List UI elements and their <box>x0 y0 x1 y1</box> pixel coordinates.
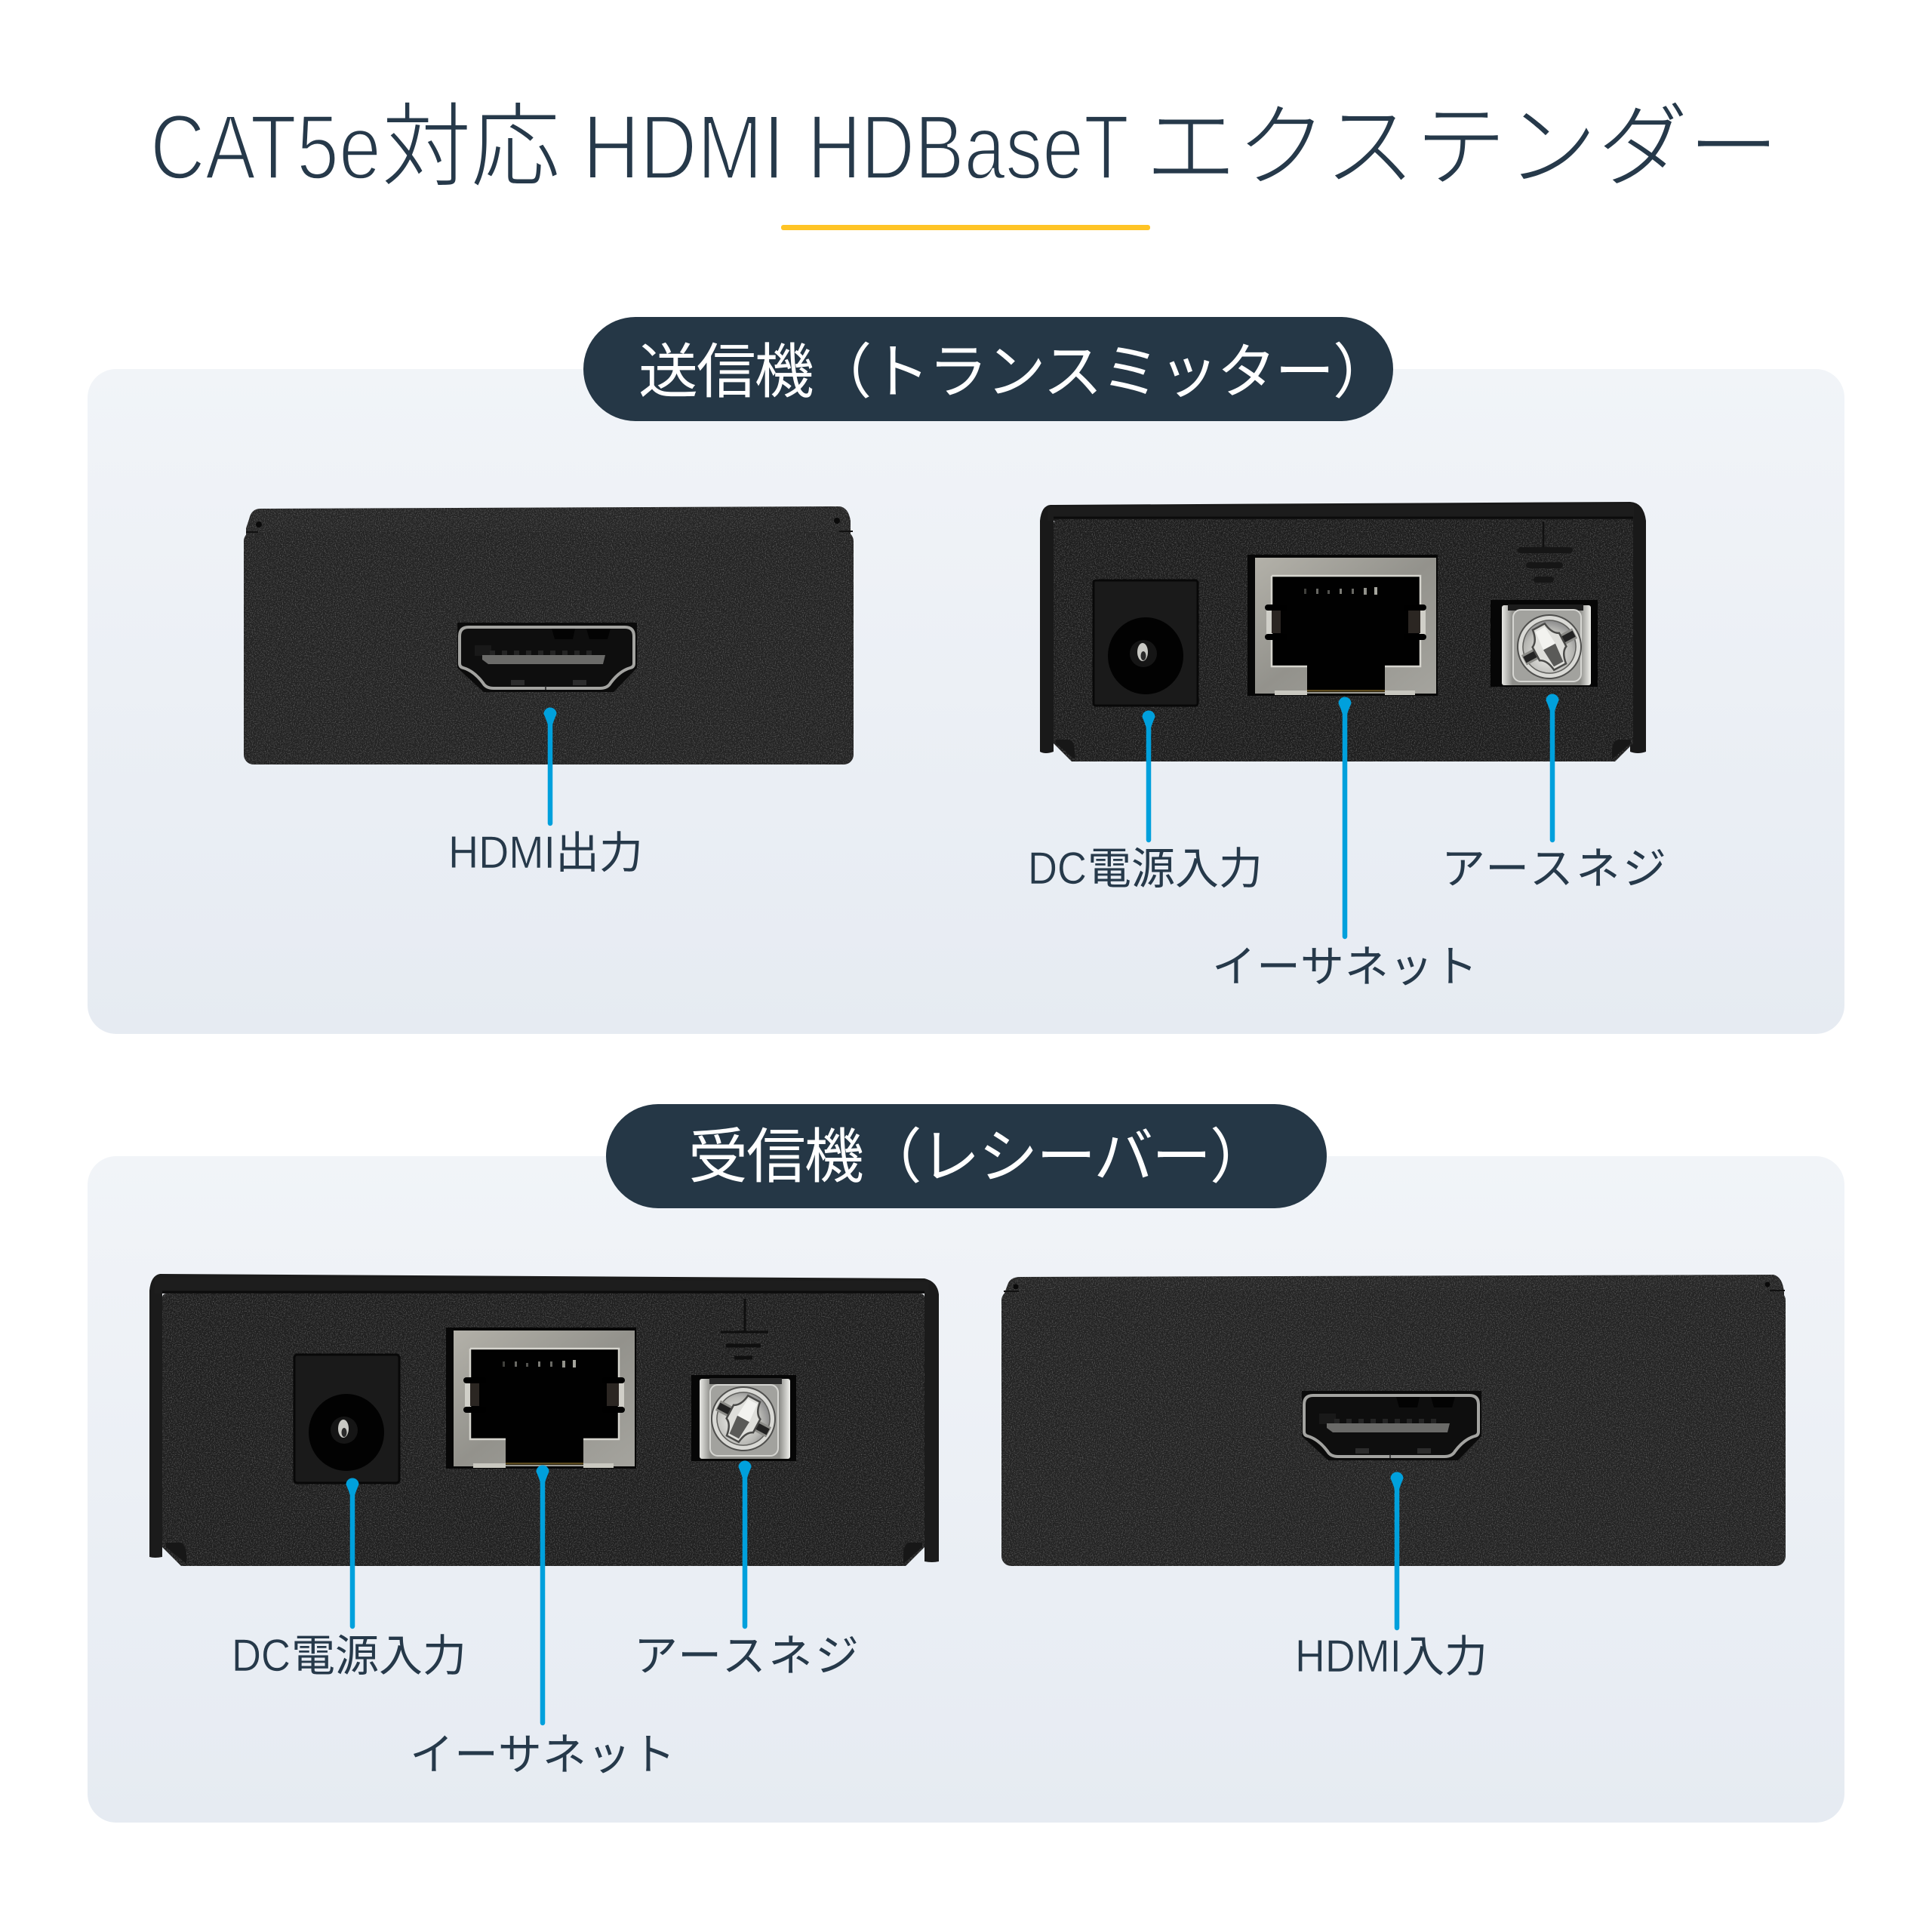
callout: ethernet <box>410 1466 675 1780</box>
title <box>150 96 1779 198</box>
panel background <box>88 369 1844 1034</box>
panel background <box>88 1156 1844 1823</box>
heading pill: receiver: 受信機（レシーバー） <box>688 1123 1269 1190</box>
title: CAT5e <box>150 96 381 198</box>
callout: DC power input: DC <box>1028 843 1087 894</box>
title: HDMI <box>583 96 785 198</box>
callout: HDMI input: HDMI <box>1295 1631 1401 1681</box>
title: HDBaseT <box>808 96 1129 198</box>
callout: ethernet: イーサネット <box>410 1730 675 1780</box>
device photo: network side <box>1040 502 1646 761</box>
heading pill: transmitter: 送信機（トランスミッター） <box>638 338 1392 405</box>
callout: DC power input: 電源入力 <box>291 1632 466 1681</box>
callout: DC power input <box>232 1478 466 1681</box>
device photo: HDMI output side <box>244 506 854 764</box>
callout: ethernet <box>1212 697 1478 992</box>
callout: ground screw <box>1441 694 1666 894</box>
callout: HDMI output <box>448 708 643 878</box>
callout: DC power input <box>1028 711 1263 894</box>
title underline <box>781 225 1150 230</box>
callout: HDMI input: 入力 <box>1401 1632 1487 1681</box>
icon: ethernet port <box>446 1327 636 1469</box>
callout: ground screw: アースネジ <box>1441 844 1666 894</box>
icon: ground terminal <box>691 1299 796 1462</box>
callout: DC power input: DC <box>232 1630 291 1681</box>
panel: transmitter <box>88 317 1844 1034</box>
icon: DC jack <box>1094 580 1198 706</box>
heading pill: transmitter <box>583 317 1393 421</box>
panel: receiver <box>88 1104 1844 1823</box>
callout: ground screw: アースネジ <box>634 1632 859 1681</box>
icon: ground terminal <box>1491 521 1598 690</box>
title: 対応 <box>382 97 560 198</box>
heading pill: receiver <box>606 1104 1327 1208</box>
callout: ground screw <box>634 1461 859 1681</box>
callout: ethernet: イーサネット <box>1212 943 1478 992</box>
callout: HDMI output: 出力 <box>555 829 643 878</box>
callout: DC power input: 電源入力 <box>1088 844 1263 894</box>
icon: DC jack <box>294 1355 399 1483</box>
device photo: network side <box>149 1274 939 1566</box>
title: エクステンダー <box>1146 97 1779 198</box>
callout: HDMI output: HDMI <box>448 827 555 878</box>
callout: HDMI input <box>1295 1472 1487 1681</box>
device photo: HDMI input side <box>1001 1275 1786 1566</box>
icon: ethernet port <box>1247 555 1438 696</box>
